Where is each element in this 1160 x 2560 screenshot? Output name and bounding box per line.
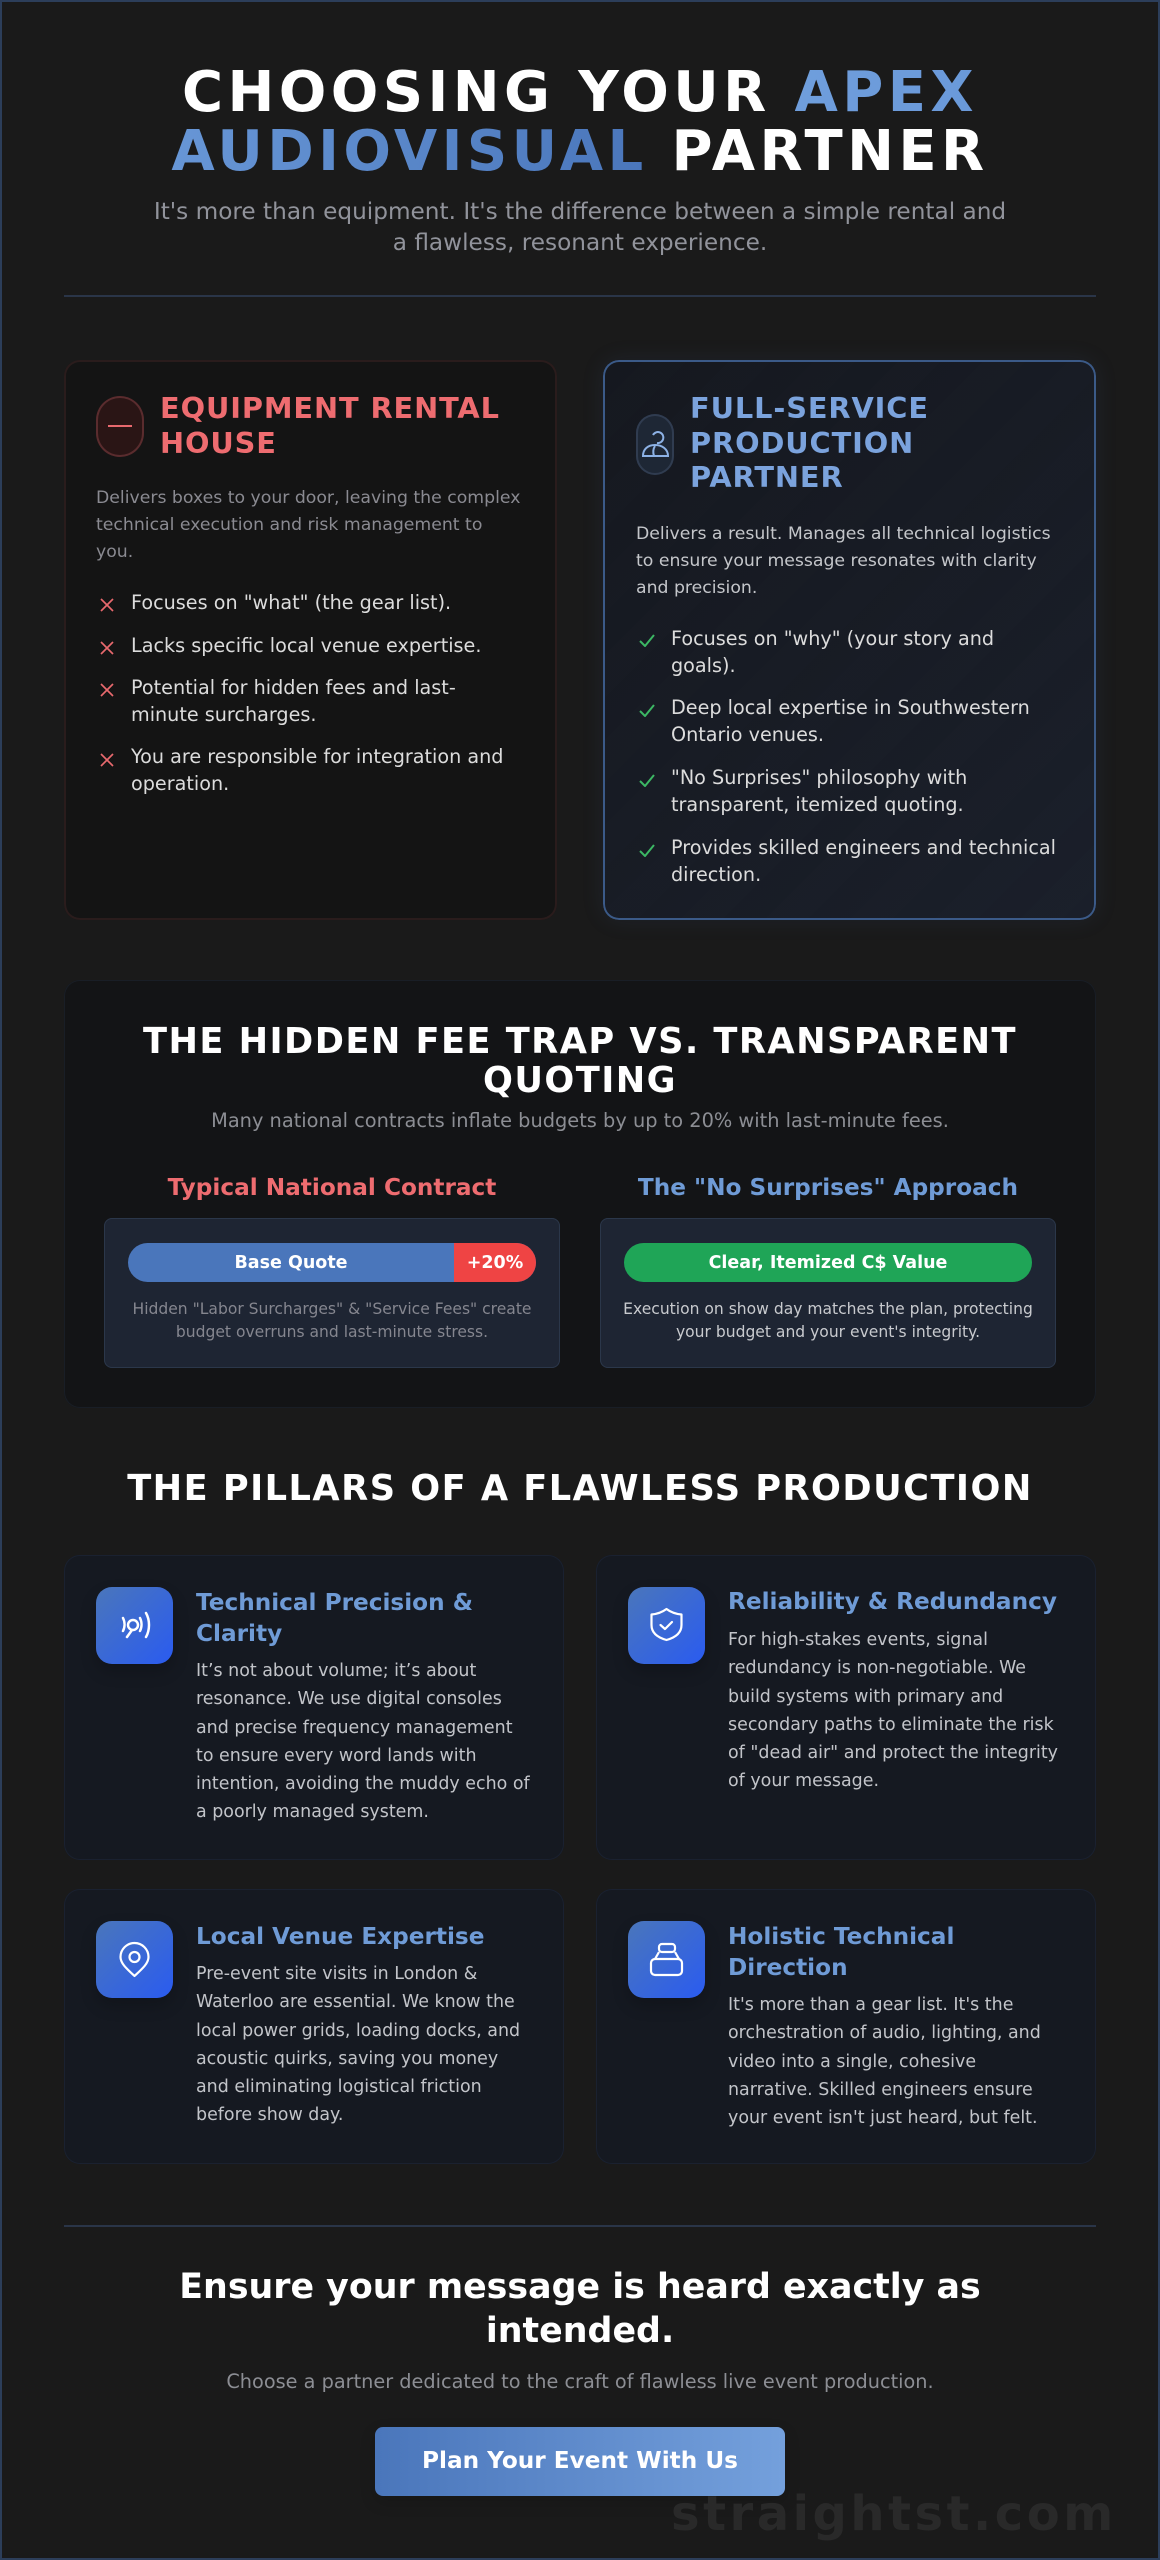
item [131,676,456,726]
heading: pillars: THE PILLARS OF A FLAWLESS PRODUCTION [127,1468,1033,1509]
icon: cross [100,641,114,655]
body text: acoustic quirks, saving you money [196,2049,498,2069]
heading: no surprises approach: The "No Surprises" Approach [638,1174,1018,1201]
description: Delivers boxes to your door, leaving the complex [96,488,520,508]
description: you. [96,542,133,562]
title [171,60,989,184]
call to action button [375,2427,785,2496]
heading: hidden fee trap vs transparent quoting: THE HIDDEN FEE TRAP VS. TRANSPARENT [143,1021,1017,1062]
caption: Execution on show day matches the plan, protecting [623,1300,1033,1318]
body text: video into a single, cohesive [728,2052,976,2072]
icon: check [639,634,655,647]
list: partner benefits [639,627,1056,886]
body text: It's more than a gear list. It's the [728,1995,1013,2015]
panel: hidden fee trap [64,980,1096,1408]
bar segment: +20% [454,1243,536,1282]
body text: It’s not about volume; it’s about [196,1661,476,1681]
body text: and eliminating logistical friction [196,2077,482,2097]
heading: full-service production partner [690,391,929,494]
body text: build systems with primary and [728,1687,1003,1707]
item: You are responsible for integration and [131,745,503,768]
body text: of your message. [728,1771,879,1791]
list: rental drawbacks [100,591,503,795]
body text: resonance. We use digital consoles [196,1689,502,1709]
item [671,836,1056,886]
footer heading [179,2267,981,2350]
comparison: typical contract box [104,1218,560,1368]
body text [196,1964,520,2125]
heading: hidden fee trap vs transparent quoting: QUOTING [483,1060,677,1101]
body text: For high-stakes events, signal [728,1630,988,1650]
bar: clear itemized value: Clear, Itemized C$ Value [709,1253,947,1273]
subtitle [154,198,1006,256]
bar: base quote plus surcharge: Base Quote [234,1253,348,1273]
body text: Waterloo are essential. We know the [196,1992,515,2012]
subtitle: It's more than equipment. It's the difference between a simple rental and [154,198,1006,225]
heading: full-service production partner: FULL-SERVICE [690,391,929,425]
body text: your event isn't just heard, but felt. [728,2108,1038,2128]
heading: equipment rental house [160,391,500,460]
heading [728,1923,954,1981]
icon: check [639,774,655,787]
body text: a poorly managed system. [196,1802,429,1822]
heading: equipment rental house: EQUIPMENT RENTAL [160,391,500,425]
footer heading: Ensure your message is heard exactly as [179,2267,981,2307]
heading: typical national contract: Typical National Contract [168,1174,496,1201]
call to action button: Plan Your Event With Us [422,2447,738,2474]
panel: local venue expertise [64,1889,564,2164]
item [671,766,967,816]
item: Lacks specific local venue expertise. [131,634,481,657]
heading: Technical Precision & [196,1589,473,1616]
heading: Local Venue Expertise [196,1923,484,1950]
item: Focuses on "why" (your story and [671,627,994,650]
bar segment: +20%: +20% [467,1253,523,1273]
title: CHOOSING YOUR APEX [182,60,978,125]
body text: secondary paths to eliminate the risk [728,1715,1054,1735]
item: Focuses on "what" (the gear list). [131,591,451,614]
panel: equipment rental house [64,360,557,920]
icon: shield check [628,1587,705,1664]
description [96,488,520,562]
item [671,627,994,677]
item: Deep local expertise in Southwestern [671,696,1030,719]
description: technical execution and risk management to [96,515,482,535]
item: Ontario venues. [671,723,824,746]
icon: check [639,844,655,857]
icon: check [639,704,655,717]
description: to ensure your message resonates with clarity [636,551,1037,571]
heading: Holistic Technical [728,1923,954,1950]
caption [623,1300,1033,1341]
heading: equipment rental house: HOUSE [160,426,277,460]
heading: full-service production partner: PARTNER [690,460,844,494]
comparison: no surprises box [600,1218,1056,1368]
description [636,524,1051,598]
subtitle: a flawless, resonant experience. [393,229,767,256]
description: and precision. [636,578,757,598]
body text: local power grids, loading docks, and [196,2021,520,2041]
caption [132,1300,532,1341]
title: AUDIOVISUAL PARTNER [171,119,989,184]
body text: Pre-event site visits in London & [196,1964,477,1984]
body text: and precise frequency management [196,1718,513,1738]
body text: orchestration of audio, lighting, and [728,2023,1041,2043]
body text: redundancy is non-negotiable. We [728,1658,1026,1678]
item: transparent, itemized quoting. [671,793,964,816]
subheading: Many national contracts inflate budgets by up to 20% with last-minute fees. [211,1109,949,1132]
item [671,696,1030,746]
item: minute surcharges. [131,703,316,726]
icon: person [636,414,674,475]
panel: technical precision [64,1555,564,1860]
bar: clear itemized value [624,1243,1032,1282]
heading: Direction [728,1954,848,1981]
icon: speaker waves [96,1587,173,1664]
body text: before show day. [196,2105,343,2125]
heading: Clarity [196,1620,282,1647]
icon: cross [100,753,114,767]
body text [728,1995,1041,2128]
item [131,745,503,795]
footer heading: intended. [486,2310,674,2350]
body text: of "dead air" and protect the integrity [728,1743,1058,1763]
icon: stacked layers [628,1921,705,1998]
description: Delivers a result. Manages all technical logistics [636,524,1051,544]
icon: location pin [96,1921,173,1998]
panel: holistic technical direction [596,1889,1096,2164]
panel: full-service production partner [603,360,1096,920]
heading: Reliability & Redundancy [728,1588,1057,1615]
body text [196,1661,530,1822]
heading: hidden fee trap vs transparent quoting [143,1021,1017,1101]
footer subtext: Choose a partner dedicated to the craft of flawless live event production. [226,2370,934,2393]
heading [196,1589,473,1647]
item: operation. [131,772,229,795]
icon: minus [96,396,144,457]
item: goals). [671,654,736,677]
item: "No Surprises" philosophy with [671,766,967,789]
body text: narrative. Skilled engineers ensure [728,2080,1033,2100]
watermark: straightst.com [671,2486,1117,2542]
body text: intention, avoiding the muddy echo of [196,1774,530,1794]
body text [728,1630,1058,1791]
item: direction. [671,863,761,886]
body text: to ensure every word lands with [196,1746,477,1766]
item: Provides skilled engineers and technical [671,836,1056,859]
panel: reliability [596,1555,1096,1860]
bar: base quote plus surcharge [128,1243,536,1282]
icon: cross [100,683,114,697]
heading: full-service production partner: PRODUCTION [690,426,914,460]
caption: budget overruns and last-minute stress. [176,1323,488,1341]
icon: cross [100,598,114,612]
caption: your budget and your event's integrity. [676,1323,980,1341]
item: Potential for hidden fees and last- [131,676,456,699]
caption: Hidden "Labor Surcharges" & "Service Fees" create [132,1300,532,1318]
